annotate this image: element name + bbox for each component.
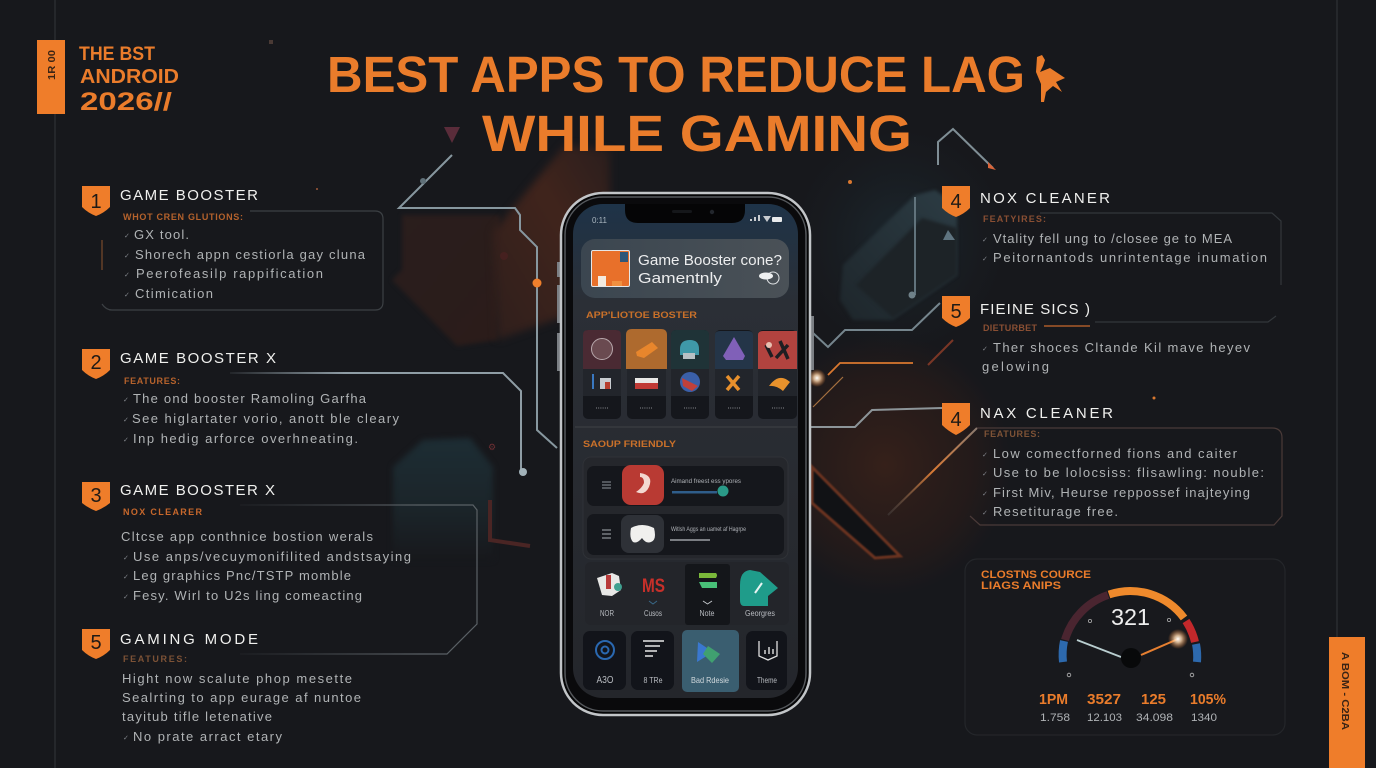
badge: top left tag xyxy=(37,40,65,114)
gaming mode text: Sealrting to app eurage af nuntoe xyxy=(122,690,361,705)
heading: the best android 2026: 2026// xyxy=(80,88,172,116)
background: left teal shape xyxy=(393,438,530,560)
badge: bottom right tag xyxy=(1329,637,1365,768)
app row 3: Cusos xyxy=(644,608,662,618)
app row 3: MS xyxy=(642,576,665,597)
fieine sics text: Ther shoces Cltande Kil mave heyev xyxy=(993,340,1250,355)
nax cleaner text xyxy=(982,429,1264,519)
list row 1 xyxy=(587,465,784,506)
gauge stats: 125 xyxy=(1141,691,1166,708)
status bar: 0:11 xyxy=(592,216,608,225)
app row 4 xyxy=(583,630,787,692)
item 4: nox cleaner xyxy=(942,186,1281,285)
gauge stats: 3527 xyxy=(1087,691,1121,708)
decorative accents xyxy=(253,40,1156,400)
fieine sics text: gelowing xyxy=(982,359,1049,374)
item 3 frame xyxy=(240,505,477,654)
item 3: game booster x / nox clearer xyxy=(82,482,477,654)
badge: bottom right tag: A BOM - C2BA xyxy=(1339,652,1351,730)
item 5: gaming mode xyxy=(82,629,361,744)
gauge stats: 12.103 xyxy=(1087,712,1122,724)
nox cleaner text xyxy=(982,214,1267,265)
gaming mode text xyxy=(122,654,361,744)
app list xyxy=(583,457,788,559)
heading: the best android 2026: ANDROID xyxy=(80,66,179,88)
app header card: Game Booster cone? xyxy=(638,252,782,269)
app row 4: 8 TRe xyxy=(644,675,663,685)
nox cleaner text: ✓ xyxy=(982,237,988,244)
nax cleaner text: FEATURES: xyxy=(984,429,1040,439)
gauge stats: 34.098 xyxy=(1136,712,1173,724)
gauge stats xyxy=(1039,691,1226,724)
item 1 text xyxy=(123,212,366,301)
item 1 frame xyxy=(102,211,383,310)
item 1 text: WHOT CREN GLUTIONS: xyxy=(123,212,243,222)
item 1 text: ✓ xyxy=(124,253,130,260)
nox cleaner text: Vtality fell ung to /closee ge to MEA xyxy=(993,231,1232,246)
nox cleaner frame xyxy=(1040,213,1281,285)
fieine sics text: ✓ xyxy=(982,346,988,353)
icon: number shield 2 xyxy=(82,349,110,379)
section label: group friendly: SAOUP FRIENDLY xyxy=(583,439,677,450)
item 3 text: NOX CLEARER xyxy=(123,507,202,517)
item 3 text: ✓ xyxy=(123,594,129,601)
circuit lines: right xyxy=(808,129,996,515)
icon: number shield 4 xyxy=(942,186,970,217)
fieine sics text: DIETURBET xyxy=(983,323,1038,333)
item 1 text: GX tool. xyxy=(134,227,189,242)
nax cleaner text: ✓ xyxy=(982,510,988,517)
phone body xyxy=(561,193,810,715)
background: dark diagonal bar xyxy=(812,467,900,558)
app header card: Gamentnly xyxy=(638,270,723,287)
item 2 text: ✓ xyxy=(123,437,129,444)
item 2 text: ✓ xyxy=(123,417,129,424)
circuit lines: left xyxy=(230,127,557,476)
heading: the best android 2026: THE BST xyxy=(79,44,155,65)
gauge heading: LIAGS ANIPS xyxy=(981,580,1061,592)
app row 3 xyxy=(585,562,789,625)
nax cleaner heading: NAX CLEANER xyxy=(980,405,1113,422)
fieine sics text xyxy=(982,323,1250,374)
icon: number shield 5 right: 5 xyxy=(950,301,962,323)
gaming mode text: Hight now scalute phop mesette xyxy=(122,671,352,686)
icon: number shield 3 xyxy=(82,482,110,511)
item 2 text xyxy=(123,376,400,446)
icon: number shield 3: 3 xyxy=(90,485,102,507)
app row 3: Georgres xyxy=(745,608,775,618)
nox cleaner text: Peitornantods unrintentage inumation xyxy=(993,250,1267,265)
gaming mode text: No prate arract etary xyxy=(133,729,282,744)
list row 1: Aimand freest ess ypores xyxy=(671,479,741,485)
phone notch xyxy=(625,204,745,223)
section label: app booster: APP'LIOTOE BOSTER xyxy=(586,310,697,321)
app grid: ⋯⋯ xyxy=(772,405,785,412)
gauge value: 321 xyxy=(1111,604,1150,630)
background: right brown haze xyxy=(760,335,1010,595)
item 1 text: Peerofeasilp rappification xyxy=(136,266,323,281)
nax cleaner text: Low comectforned fions and caiter xyxy=(993,446,1238,461)
item 2 text: FEATURES: xyxy=(124,376,180,386)
item 1 text: ✓ xyxy=(124,292,130,299)
nox cleaner heading: NOX CLEANER xyxy=(980,190,1110,207)
app header card xyxy=(581,239,789,298)
fieine sics divider xyxy=(1044,316,1276,326)
app grid: ⋯⋯ xyxy=(728,405,741,412)
phone side buttons xyxy=(557,262,814,371)
nax cleaner frame xyxy=(970,428,1282,525)
item 2 text: ✓ xyxy=(123,397,129,404)
title xyxy=(327,46,1025,162)
icon: running figure with flag xyxy=(1036,55,1065,102)
nox cleaner text: ✓ xyxy=(982,256,988,263)
item 3 text: Use anps/vecuymonifilited andstsaying xyxy=(133,549,411,564)
app grid: ⋯⋯ xyxy=(684,405,697,412)
icon: number shield 2: 2 xyxy=(90,352,102,374)
nox cleaner text: FEATYIRES: xyxy=(983,214,1046,224)
item 1: game booster xyxy=(82,186,383,310)
item 3 text: Cltcse app conthnice bostion werals xyxy=(121,529,374,544)
item 4: nax cleaner xyxy=(942,403,1282,525)
title: WHILE GAMING xyxy=(482,105,912,162)
icon: number shield 4: 4 xyxy=(950,191,962,213)
gauge dial xyxy=(1063,591,1197,662)
gauge stats: 1340 xyxy=(1191,712,1217,724)
background: left brown hexagon xyxy=(392,145,610,346)
app row 4: Theme xyxy=(757,675,777,685)
gaming mode text: FEATURES: xyxy=(123,654,187,664)
list row 2 xyxy=(587,514,784,555)
panel: gauge xyxy=(965,559,1285,735)
fieine sics heading: FIEINE SICS ) xyxy=(980,301,1090,318)
gauge heading xyxy=(981,569,1091,592)
phone xyxy=(557,193,814,715)
nax cleaner text: Use to be lolocsiss: flisawling: nouble: xyxy=(993,465,1264,480)
nax cleaner text: Resetiturage free. xyxy=(993,504,1118,519)
item 1 text: Shorech appn cestiorla gay cluna xyxy=(135,247,366,262)
gauge needles xyxy=(1067,618,1194,677)
background: right blue hexagon xyxy=(790,125,1010,355)
gaming mode heading: GAMING MODE xyxy=(120,631,258,648)
item 1 heading: GAME BOOSTER xyxy=(120,187,258,204)
gaming mode text: ✓ xyxy=(123,735,129,742)
gauge stats: 1PM xyxy=(1039,691,1068,708)
nax cleaner text: ✓ xyxy=(982,491,988,498)
gauge heading: CLOSTNS COURCE xyxy=(981,569,1091,581)
item 2 text: See higlartater vorio, anott ble cleary xyxy=(132,411,400,426)
app row 3: NOR xyxy=(600,608,614,618)
item 3 text: ✓ xyxy=(123,574,129,581)
item 1 text: ✓ xyxy=(124,272,130,279)
heading: the best android 2026 xyxy=(79,44,179,116)
item 1 text: Ctimication xyxy=(135,286,213,301)
app row 4: A3O xyxy=(596,675,614,686)
item 2 heading: GAME BOOSTER X xyxy=(120,350,276,367)
item 2 text: The ond booster Ramoling Garfha xyxy=(133,391,367,406)
icon: number shield 5 xyxy=(82,629,110,659)
item 1 text: ✓ xyxy=(124,233,130,240)
icon: number shield 5 right xyxy=(942,296,970,327)
icon: number shield 4 lower xyxy=(942,403,970,435)
status bar xyxy=(592,215,782,225)
nax cleaner text: ✓ xyxy=(982,471,988,478)
item 2: game booster x xyxy=(82,349,400,446)
nax cleaner text: First Miv, Heurse reppossef inajteying xyxy=(993,485,1250,500)
app grid: ⋯⋯ xyxy=(596,405,609,412)
item 5: fieine sics xyxy=(942,296,1276,374)
gauge stats: 105% xyxy=(1190,691,1226,708)
app row 3: Note xyxy=(700,608,715,618)
item 2 text: Inp hedig arforce overhneating. xyxy=(133,431,358,446)
gauge stats: 1.758 xyxy=(1040,712,1070,724)
badge: top left tag: 1R 00 xyxy=(47,50,58,80)
list row 2: Witlsh Aggs an uamet af Hagrpe xyxy=(671,527,747,533)
title: BEST APPS TO REDUCE LAG xyxy=(327,46,1025,103)
icon: number shield 1 xyxy=(82,186,110,216)
icon: number shield 1: 1 xyxy=(90,191,102,213)
nax cleaner text: ✓ xyxy=(982,452,988,459)
icon: number shield 5: 5 xyxy=(90,632,102,654)
background: left teal shape: ⚙ xyxy=(488,442,496,452)
item 3 text: Leg graphics Pnc/TSTP momble xyxy=(133,568,351,583)
app row 4: Bad Rdesie xyxy=(691,675,729,685)
app grid xyxy=(583,329,797,419)
icon: number shield 4 lower: 4 xyxy=(950,409,962,431)
item 3 text: Fesy. Wirl to U2s ling comeacting xyxy=(133,588,362,603)
item 3 text xyxy=(121,507,411,603)
item 3 text: ✓ xyxy=(123,555,129,562)
app grid: ⋯⋯ xyxy=(640,405,653,412)
item 3 heading: GAME BOOSTER X xyxy=(120,482,275,499)
gaming mode text: tayitub tifle letenative xyxy=(122,709,272,724)
